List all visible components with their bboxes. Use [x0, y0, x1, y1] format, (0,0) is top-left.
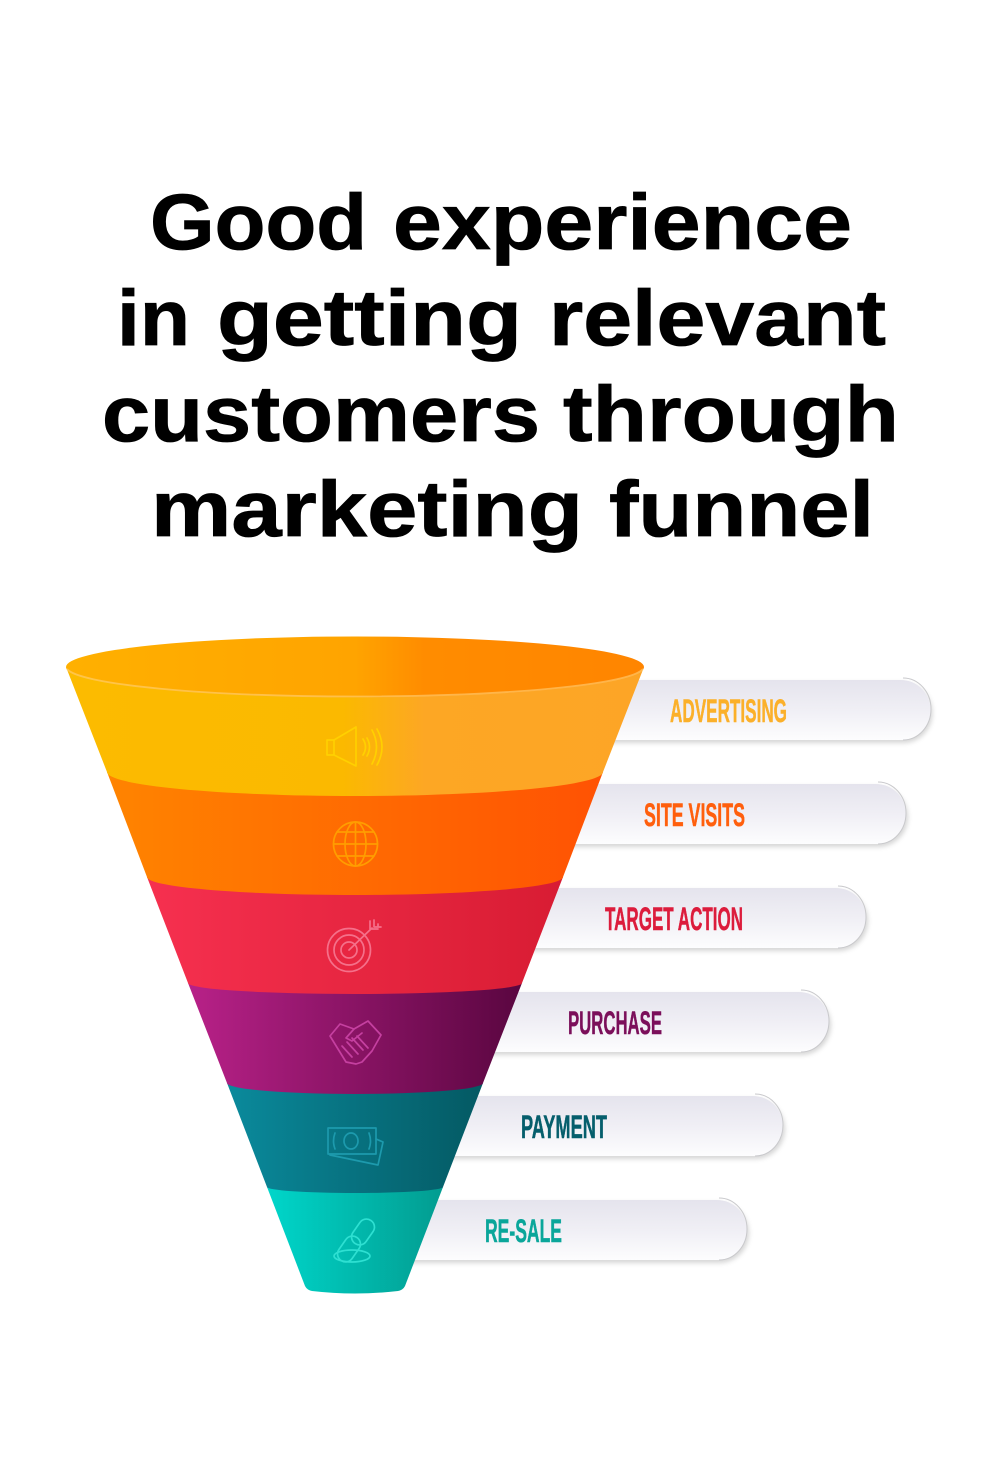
rim highlight [67, 669, 643, 697]
title: customers [102, 369, 540, 458]
funnel band: target action [147, 877, 563, 994]
pill: site visits: SITE VISITS [644, 797, 745, 833]
pill: re-sale: RE-SALE [485, 1213, 562, 1249]
pill: payment: PAYMENT [521, 1109, 607, 1145]
icon: globe [334, 822, 378, 866]
icon: chain link [334, 1216, 378, 1265]
pill: purchase: PURCHASE [568, 1005, 662, 1041]
title: experience [393, 177, 852, 266]
icon: target [328, 920, 381, 972]
title: getting [217, 273, 522, 362]
pill: purchase [440, 990, 829, 1052]
icon: handshake [330, 1021, 381, 1064]
title: in [117, 273, 190, 362]
pill: site visits [520, 782, 906, 844]
funnel band: re-sale [267, 1187, 443, 1294]
funnel rim [66, 636, 644, 698]
title [102, 177, 899, 553]
funnel band: advertising [66, 667, 644, 796]
pill: advertising: ADVERTISING [670, 693, 787, 729]
funnel band: site visits [107, 772, 603, 895]
pill: payment [400, 1094, 783, 1156]
label pills [360, 678, 931, 1260]
pill: re-sale [360, 1198, 747, 1260]
icon: money [328, 1128, 383, 1165]
title: Good [150, 177, 367, 266]
pill: target action: TARGET ACTION [605, 901, 743, 937]
icon: speaker [327, 727, 382, 766]
pill: target action [480, 886, 866, 948]
funnel band: purchase [188, 983, 522, 1094]
pill: advertising [560, 678, 931, 740]
title: relevant [549, 273, 886, 362]
title: funnel [609, 464, 874, 553]
title: through [563, 369, 899, 458]
funnel [66, 636, 644, 1294]
funnel band: payment [227, 1083, 483, 1193]
title: marketing [151, 464, 583, 553]
